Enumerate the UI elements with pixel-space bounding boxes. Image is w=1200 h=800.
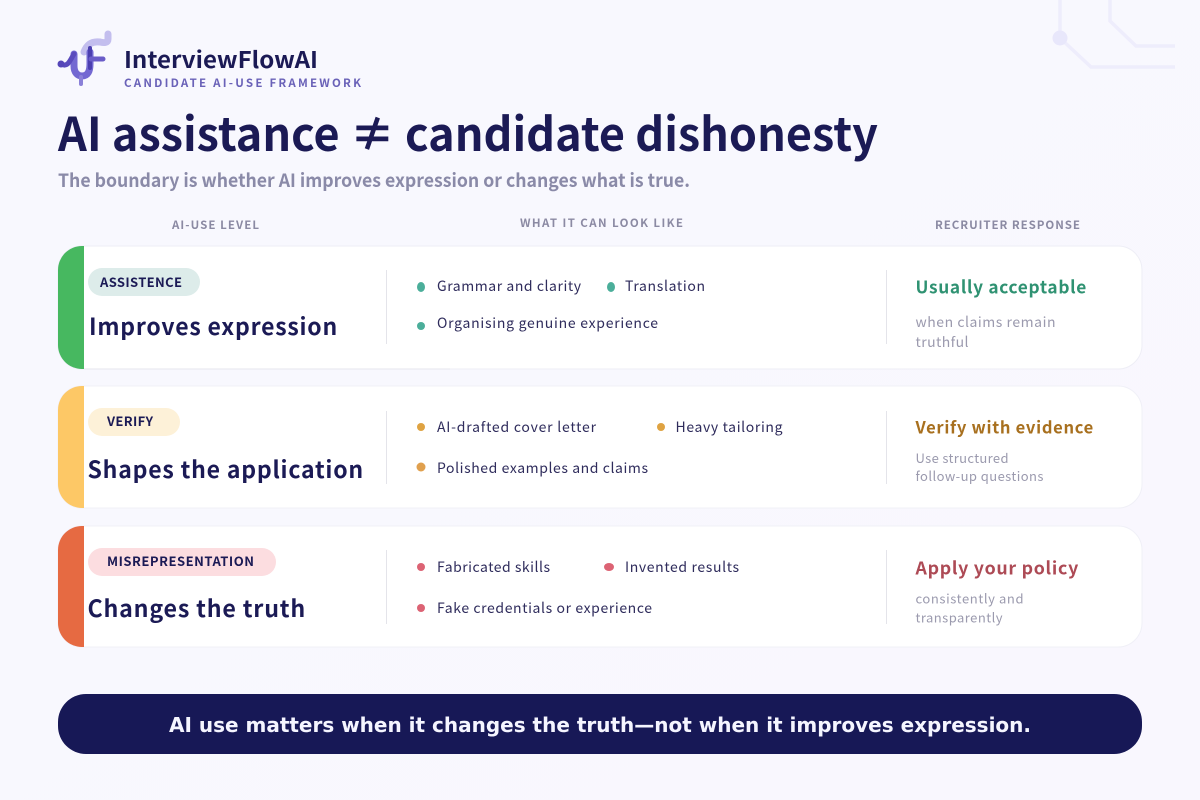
examples list: Grammar and clarity — [437, 276, 582, 296]
takeaway banner: AI use matters when it changes the truth—not when it improves expression. — [169, 713, 1031, 737]
column header: response: RECRUITER RESPONSE — [935, 217, 1080, 233]
recruiter response: truthful — [916, 332, 969, 352]
examples list: Fake credentials or experience — [437, 598, 652, 618]
column header: examples: WHAT IT CAN LOOK LIKE — [520, 215, 683, 231]
recruiter response: Use structured — [916, 448, 1008, 467]
examples list — [416, 417, 783, 478]
recruiter response — [914, 556, 1079, 626]
recruiter response: when claims remain — [916, 312, 1056, 332]
panel: misrepresentation row — [58, 525, 1142, 647]
examples list: AI-drafted cover letter — [437, 417, 597, 437]
recruiter response: Apply your policy — [914, 556, 1079, 580]
examples list — [417, 557, 739, 618]
accent bar: green — [58, 246, 84, 369]
tag: misrepresentation: MISREPRESENTATION — [107, 551, 254, 570]
title: AI assistance ≠ candidate dishonesty — [57, 98, 878, 165]
recruiter response: follow-up questions — [916, 466, 1044, 485]
examples list: Fabricated skills — [437, 557, 550, 577]
examples list: Organising genuine experience — [437, 313, 658, 333]
icon: logo — [58, 34, 108, 84]
recruiter response: Usually acceptable — [916, 274, 1087, 300]
logo and brand — [58, 34, 361, 91]
recruiter response — [914, 414, 1094, 485]
level heading: Changes the truth — [88, 590, 306, 624]
tag: verify: VERIFY — [106, 411, 153, 430]
tag: assistence — [88, 268, 200, 296]
tag: assistence: ASSISTENCE — [99, 272, 182, 291]
decorative circuit motif — [1052, 0, 1175, 67]
brand name: InterviewFlowAI — [124, 41, 318, 75]
column header: level: AI-USE LEVEL — [171, 217, 259, 233]
column headers — [171, 215, 1080, 233]
recruiter response: transparently — [916, 608, 1003, 626]
examples list — [417, 276, 705, 333]
panel: assistance row — [58, 246, 1142, 370]
tag: misrepresentation — [88, 548, 276, 576]
examples list: Translation — [625, 276, 705, 296]
subtitle: The boundary is whether AI improves expression or changes what is true. — [58, 167, 690, 193]
accent bar: orange — [58, 525, 84, 647]
recruiter response: consistently and — [916, 588, 1024, 608]
examples list: Invented results — [625, 557, 739, 577]
tag: verify — [88, 408, 180, 436]
accent bar: amber — [58, 385, 84, 508]
recruiter response — [916, 274, 1087, 352]
level heading: Shapes the application — [88, 451, 364, 485]
examples list: Heavy tailoring — [676, 417, 783, 437]
examples list: Polished examples and claims — [437, 458, 648, 478]
takeaway banner — [58, 694, 1142, 754]
level heading: Improves expression — [89, 308, 338, 342]
panel: verify row — [58, 385, 1142, 508]
brand tagline: CANDIDATE AI-USE FRAMEWORK — [124, 75, 361, 91]
recruiter response: Verify with evidence — [914, 414, 1094, 438]
